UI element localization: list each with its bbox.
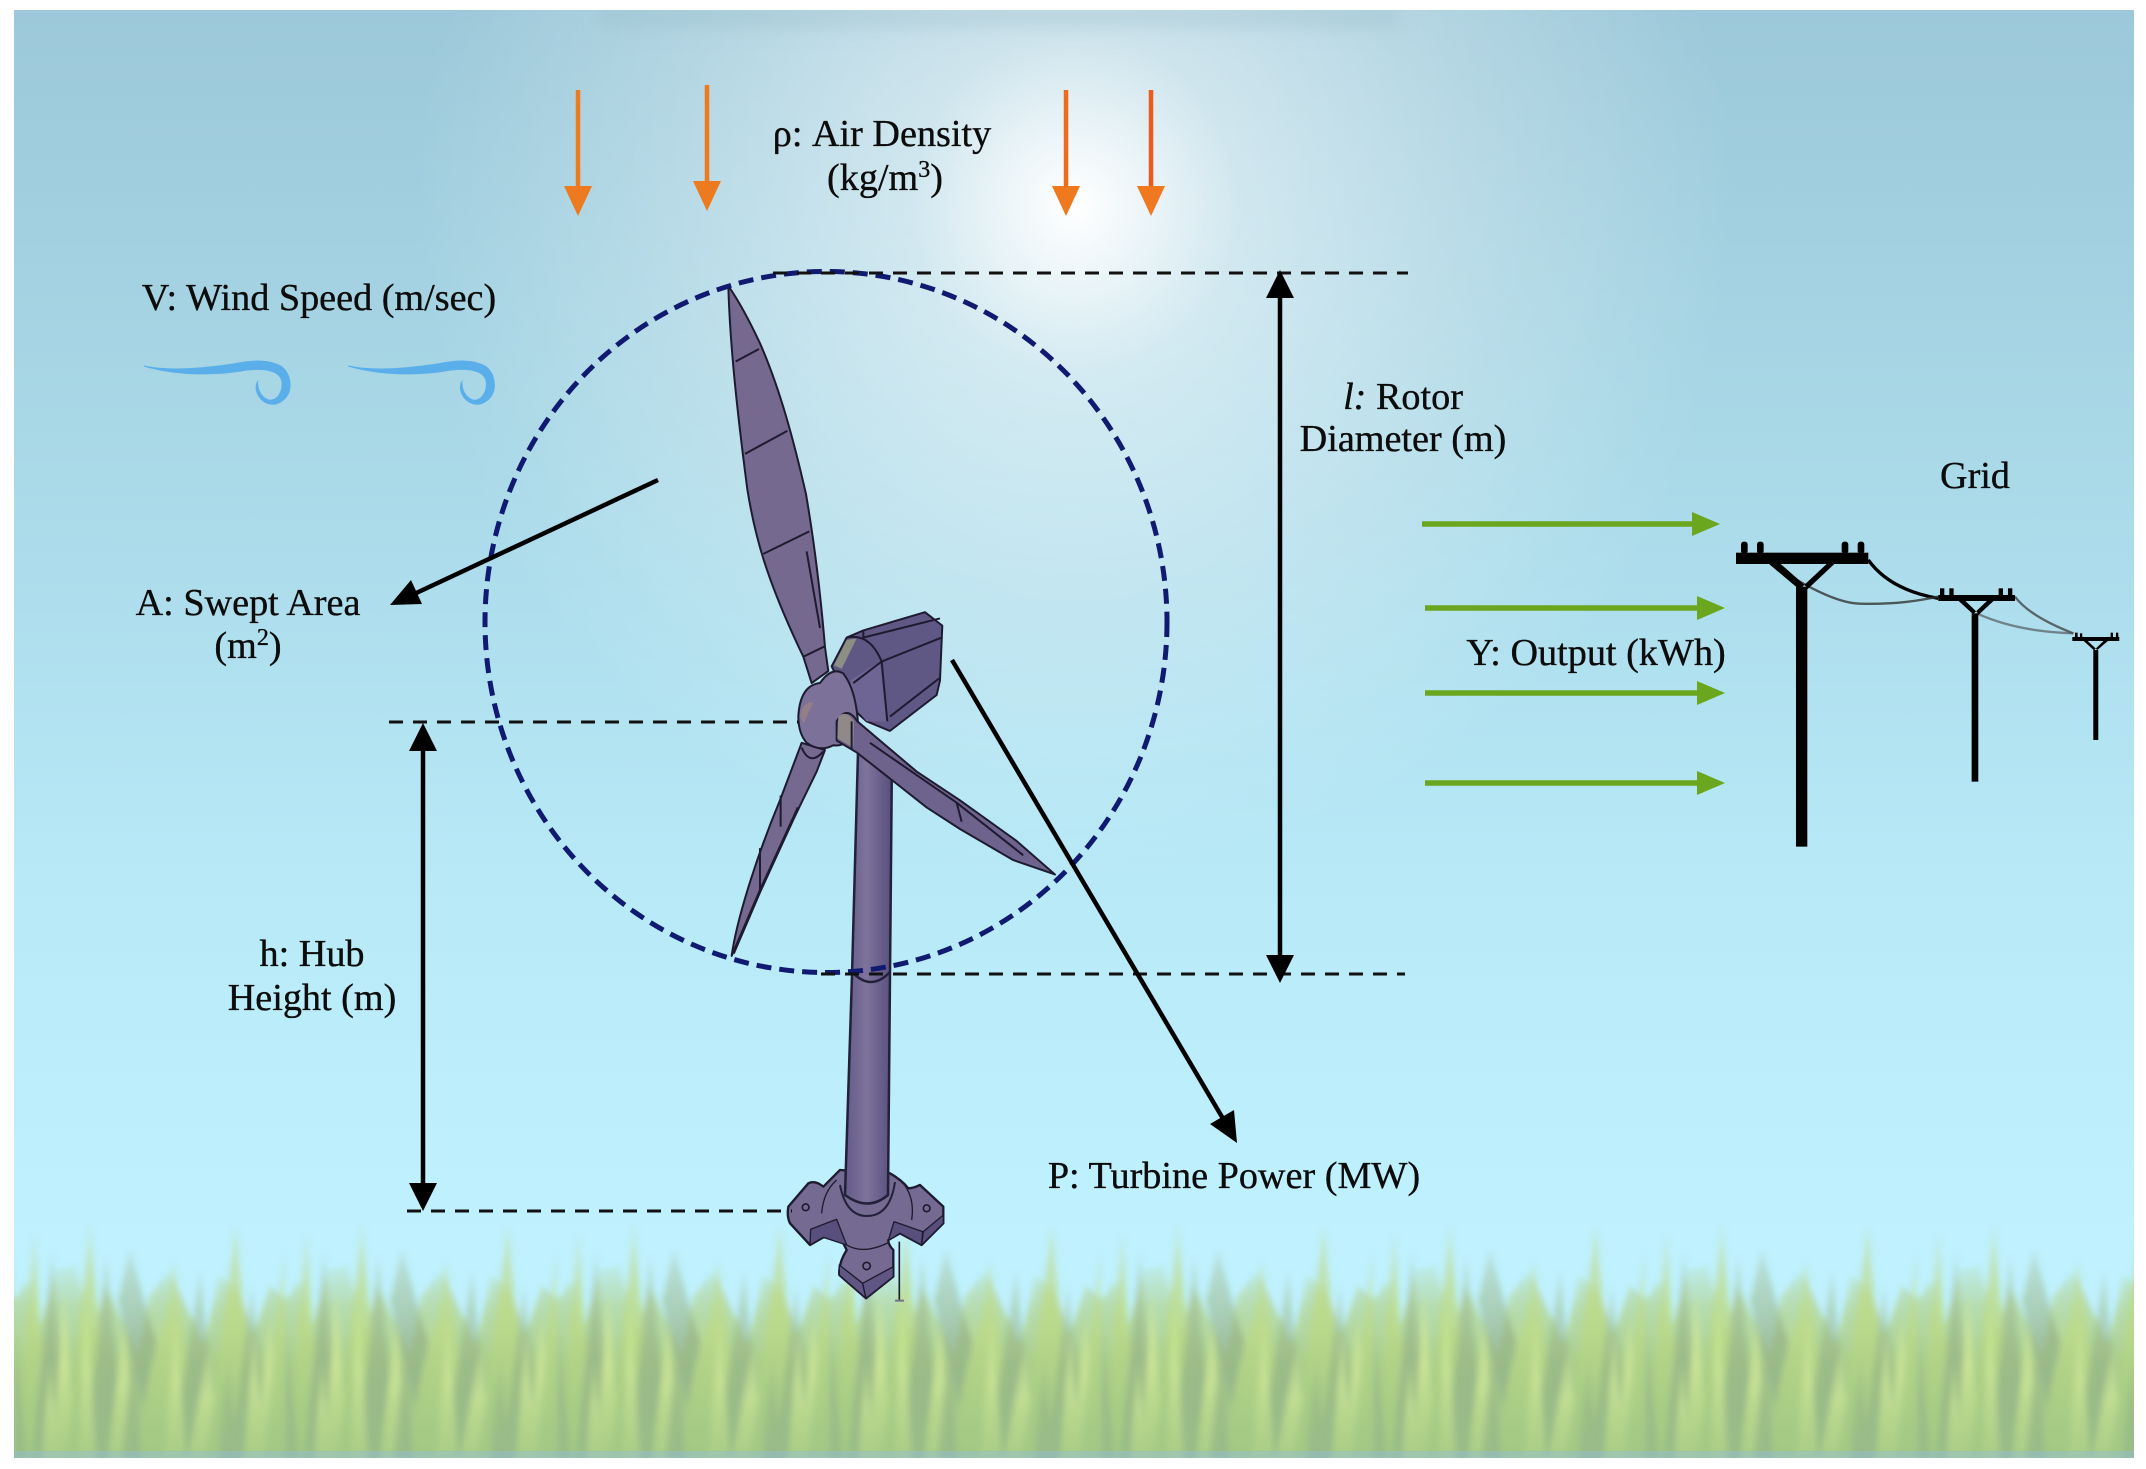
grass strip: [14, 1230, 2134, 1458]
pole 2: [1938, 588, 2015, 782]
arrow 4: [1137, 90, 1165, 216]
icon: wind swirl 1: [144, 361, 290, 404]
arrow: hub height: [409, 723, 437, 1211]
arrow 3: [1052, 90, 1080, 216]
label: grid: Grid: [1940, 455, 2010, 497]
arrow: turbine power pointer: [952, 660, 1237, 1143]
nacelle: [832, 612, 942, 731]
bottom rotor dashed line: [821, 972, 1405, 976]
power grid poles: [1736, 542, 2119, 847]
label: output: Y: Output (kWh): [1466, 632, 1726, 674]
label: hub height: h: Hub: [259, 933, 365, 975]
arrow: rotor diameter: [1266, 270, 1294, 983]
hub level dashed line: [389, 720, 798, 724]
output arrow 3: [1425, 681, 1725, 705]
label: turbine power: P: Turbine Power (MW): [1048, 1155, 1420, 1197]
label: rotor diameter: Diameter (m): [1300, 418, 1506, 460]
blade 3: [837, 713, 1055, 874]
air density arrows: [564, 85, 1165, 216]
arrow 1: [564, 90, 592, 216]
output arrow 2: [1425, 596, 1725, 620]
arrow 2: [693, 85, 721, 211]
label: air density: ρ: Air Density: [773, 113, 991, 155]
label: swept area: [136, 582, 360, 667]
output arrow 4: [1425, 771, 1725, 795]
label: air density: 3: [918, 157, 930, 183]
rotor: blades, nacelle and hub: [728, 286, 1055, 956]
label: swept area: (m: [214, 625, 257, 667]
label: rotor diameter: [1300, 376, 1506, 460]
label: wind speed: V: Wind Speed (m/sec): [142, 277, 496, 319]
top rotor dashed line: [773, 272, 1408, 274]
label: air density: [773, 113, 991, 199]
blade 2: [732, 743, 825, 956]
hub: [798, 671, 858, 748]
turbine base: [788, 1170, 943, 1301]
label: hub height: [228, 933, 396, 1019]
wind turbine: [728, 286, 1055, 1301]
label: swept area: 2: [257, 625, 269, 651]
label: swept area: A: Swept Area: [136, 582, 360, 624]
label: rotor diameter: l: Rotor: [1343, 376, 1463, 418]
ground level dashed line: [407, 1210, 792, 1212]
wires: [1783, 560, 2073, 633]
label: hub height: Height (m): [228, 977, 396, 1019]
label: air density: ): [930, 157, 943, 199]
pole 1: [1736, 542, 1868, 847]
icon: wind swirl 2: [348, 361, 494, 404]
blade 1: [728, 286, 828, 683]
output arrow 1: [1422, 512, 1720, 536]
output arrows: [1422, 512, 1725, 795]
swept area circle: [485, 272, 1167, 972]
tower: [840, 752, 895, 1216]
label: swept area: ): [269, 625, 282, 667]
arrow: swept area pointer: [390, 480, 658, 605]
label: air density: (kg/m: [827, 157, 918, 199]
pole 3: [2072, 633, 2119, 740]
